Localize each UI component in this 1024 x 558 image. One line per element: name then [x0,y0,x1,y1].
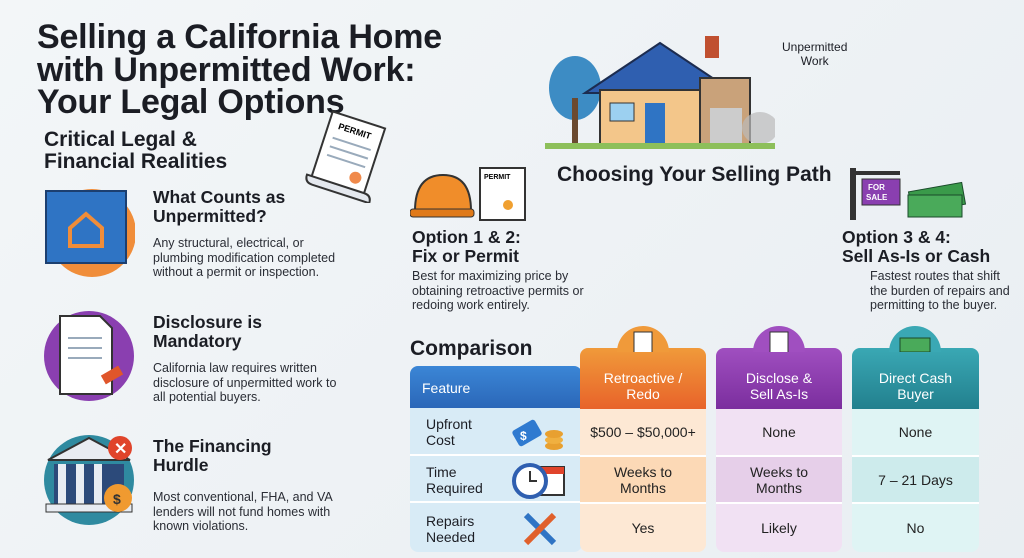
column: disclose: Weeks to [750,464,808,480]
option 3&4 [842,168,1010,312]
column: cash buyer: 7 – 21 Days [878,472,953,488]
column: disclose [716,348,842,552]
heading [153,436,272,475]
column: disclose: Disclose & [746,370,812,386]
feature column [410,366,582,552]
column: cash buyer: No [907,520,924,536]
heading: The Financing [153,436,272,456]
column: retroactive: Redo [626,386,660,402]
label: unpermitted work: Work [801,54,829,68]
illustration: house [545,36,775,149]
column: disclose: Likely [761,520,797,536]
title: with Unpermitted Work: [37,50,415,88]
icon: hard hat and permit [410,167,526,221]
feature column: Feature [422,380,470,396]
feature column: Required [426,480,483,496]
body: Best for maximizing price by obtaining retroactive permits or redoing work entirely. [412,269,584,312]
column: retroactive: Yes [632,520,654,536]
feature column: Needed [426,529,475,545]
column: retroactive: Retroactive / [604,370,682,386]
column: retroactive: Weeks to [614,464,672,480]
heading [153,187,285,226]
item 1 [45,187,335,279]
subtitle [44,128,227,173]
body: California law requires written disclosure of unpermitted work to all potential buyers. [153,361,336,404]
label: unpermitted work [782,40,847,68]
comparison table [410,326,979,552]
column: cash buyer [852,348,979,552]
label: unpermitted work: Unpermitted [782,40,847,54]
heading: What Counts as [153,187,285,207]
item 2 [44,311,336,404]
heading [412,227,521,266]
icon: bank [44,435,134,525]
heading: Option 1 & 2: [412,227,521,247]
icon: hard hat and permit: PERMIT [484,174,511,181]
title [36,18,442,121]
feature column: Time [426,464,457,480]
heading [842,227,990,266]
body: Most conventional, FHA, and VA lenders will not fund homes with known violations. [153,490,332,533]
icon tabs [617,326,941,352]
body: Any structural, electrical, or plumbing modification completed without a permit or inspection. [153,236,335,279]
subtitle: Financial Realities [44,150,227,173]
body: Fastest routes that shift the burden of repairs and permitting to the buyer. [870,269,1010,312]
icon: bank: ✕ [114,441,127,458]
icon: tools [524,512,556,546]
heading: choosing path: Choosing Your Selling Path [557,163,832,186]
icon: permit scroll [305,110,386,203]
heading: Sell As-Is or Cash [842,246,990,266]
heading: Unpermitted? [153,206,267,226]
feature column: Cost [426,432,455,448]
icon: clock calendar [512,463,565,499]
icon: price tag coins [512,420,563,450]
column: cash buyer: Direct Cash [879,370,952,386]
title: Your Legal Options [37,83,344,121]
heading: Disclosure is [153,312,262,332]
heading: Option 3 & 4: [842,227,951,247]
column: disclose: Months [756,480,802,496]
icon: blueprint [45,189,135,277]
title: Selling a California Home [37,18,442,56]
heading: Mandatory [153,331,241,351]
icon: price tag coins: $ [520,429,527,443]
heading: Fix or Permit [412,246,519,266]
column: retroactive: Months [620,480,666,496]
icon: for sale sign and cash: SALE [866,193,888,202]
column: cash buyer: Buyer [897,386,934,402]
heading: comparison: Comparison [410,337,533,360]
column: disclose: None [762,424,796,440]
column: disclose: Sell As-Is [750,386,808,402]
heading [153,312,262,351]
feature column: Repairs [426,513,474,529]
column: retroactive: $500 – $50,000+ [590,424,696,440]
icon: bank: $ [113,491,121,507]
subtitle: Critical Legal & [44,128,197,151]
column: cash buyer: None [899,424,932,440]
option 1&2 [410,167,584,312]
icon: for sale sign and cash [850,168,966,220]
heading: Hurdle [153,455,208,475]
item 3 [44,435,333,533]
icon: permit scroll: PERMIT [337,121,373,141]
icon: for sale sign and cash: FOR [868,183,885,192]
column: retroactive [580,348,706,552]
feature column: Upfront [426,416,472,432]
icon: disclosure document [44,311,134,401]
